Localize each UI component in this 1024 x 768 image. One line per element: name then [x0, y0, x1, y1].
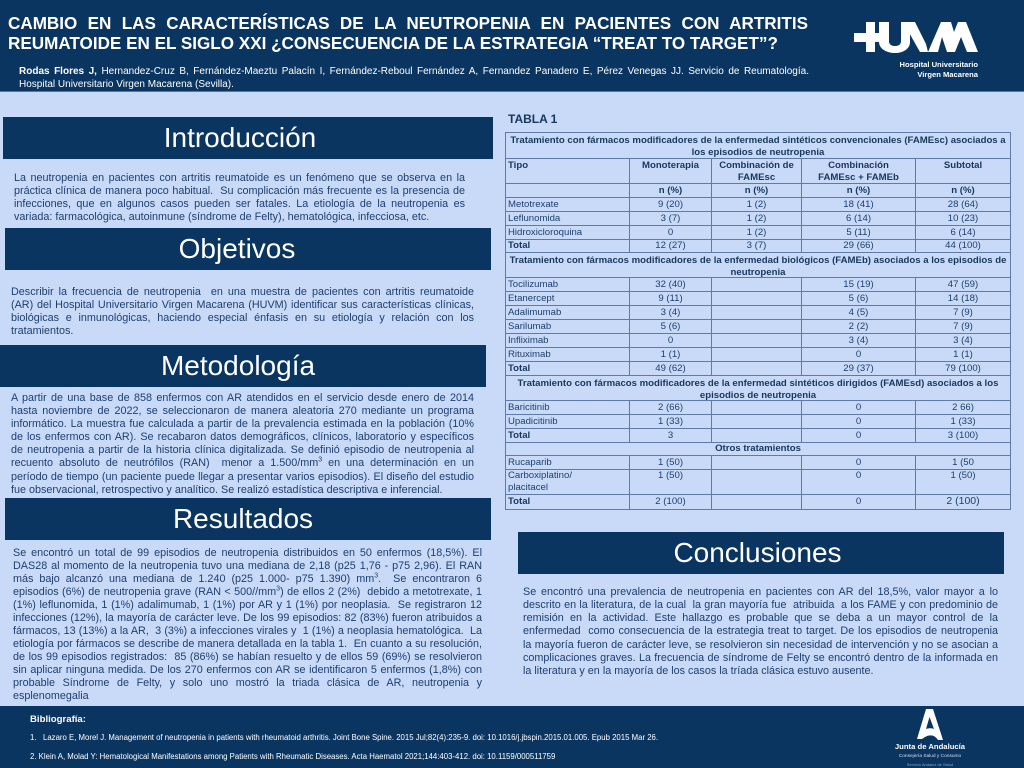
table 1: 32 (40) — [655, 279, 686, 290]
text: resultados: fármacos, 13 (13%) a la AR, 3 (3%) a infecciones virales y 1 (1%) a neoplasia hematológica. La — [13, 625, 482, 637]
table 1: 3 (4) — [849, 335, 868, 346]
heading: Introducción: Introducción — [164, 122, 316, 153]
table 1: Total — [508, 240, 530, 251]
table 1: placitacel — [508, 482, 548, 493]
table 1: 14 (18) — [948, 293, 978, 304]
text: conclusiones: Se encontró una prevalencia de neutropenia en pacientes con AR del 18,5%, valor mayor a lo — [523, 586, 998, 598]
table 1: 1 (50) — [658, 470, 683, 481]
heading: Introducción — [3, 117, 493, 159]
table 1: 3 (4) — [661, 307, 680, 318]
table 1: 29 (66) — [843, 240, 874, 251]
text: introducción: La neutropenia en pacientes con artritis reumatoide es un fenómeno que se observa en la — [14, 172, 465, 184]
text: resultados: episodios (6%) de neutropenia grave (RAN < 500//mm3) de ellos 2 (2%) debido a metotrexate, 1 — [13, 585, 482, 598]
table 1: FAMEsc — [738, 172, 775, 182]
table 1: Etanercept — [508, 293, 554, 304]
title: CAMBIO EN LAS CARACTERÍSTICAS DE LA NEUTROPENIA EN PACIENTES CON ARTRITIS — [8, 14, 808, 33]
table 1: Adalimumab — [508, 307, 561, 318]
table 1: n (%) — [745, 185, 768, 196]
table 1: Monoterapia — [642, 160, 699, 171]
table 1: 44 (100) — [945, 240, 981, 251]
table 1: 9 (20) — [658, 199, 683, 210]
table 1: 0 — [856, 496, 861, 507]
text: metodología — [11, 392, 474, 496]
table 1: Total — [508, 363, 530, 374]
reference 1: 1. Lazaro E, Morel J. Management of neutropenia in patients with rheumatoid arthritis. Joint Bone Spine. 2015 Jul;82(4):235-9. doi: 10.1016/j.jbspin.2015.01.005. Epub 2015 Mar 26. — [30, 733, 658, 742]
table 1: 18 (41) — [843, 199, 874, 210]
table 1: 0 — [668, 335, 673, 346]
table 1: 0 — [856, 470, 861, 481]
table 1: 3 (100) — [948, 430, 978, 441]
heading: Resultados: Resultados — [173, 503, 313, 534]
table 1: Carboxiplatino/ — [508, 470, 572, 481]
table 1: 0 — [856, 402, 861, 413]
text: conclusiones: remisión en la actividad. Este hallazgo es probable que se deba a un mayor control de la — [523, 612, 998, 624]
table 1: 0 — [856, 349, 861, 360]
text: resultados: (1%) leflunomida, 1 (1%) adalimumab, 1 (1%) por AR y 1 (1%) por neoplasia. Se registraron 12 — [13, 599, 482, 611]
text: resultados: más bajo alcanzó una mediana de 1.240 (p25 1.000- p75 1.390) mm3. Se encontraron 6 — [13, 572, 482, 585]
table 1: Upadicitinib — [508, 416, 558, 427]
text: objetivos: Describir la frecuencia de neutropenia en una muestra de pacientes con artritis reumatoide — [11, 286, 474, 298]
table 1: 1 (50 — [952, 457, 974, 468]
table 1: n (%) — [847, 185, 870, 196]
table 1: 2 (66) — [658, 402, 683, 413]
text: objetivos: (AR) del Hospital Universitario Virgen Macarena (HUVM) identificar sus características clínicas, — [11, 299, 474, 311]
table 1: Rituximab — [508, 349, 551, 360]
table 1: Metotrexate — [508, 199, 559, 210]
text: resultados: infecciones (12%), la mayoría de carácter leve. De los 99 episodios: 82 (83%) fueron atribuidos a — [13, 612, 482, 624]
text: introducción — [14, 172, 465, 223]
table 1: n (%) — [951, 185, 975, 196]
text: resultados: DAS28 al momento de la neutropenia tuvo una mediana de 2,18 (p25 1,76 - p75 2,96). El RAN — [13, 560, 482, 572]
table 1: 3 (7) — [747, 240, 766, 251]
table 1: Tratamiento con fármacos modificadores de la enfermedad sintéticos convencionales (FAMEsc) asociados a los episodios de neutropenia — [510, 135, 1006, 158]
table 1: Hidroxicloroquina — [508, 227, 582, 238]
heading: Objetivos — [5, 228, 491, 270]
table 1: 5 (11) — [846, 227, 871, 238]
table 1: 7 (9) — [953, 307, 973, 318]
heading: Resultados — [5, 498, 491, 540]
text: resultados: etiología por fármacos se describe de manera detallada en la tabla 1. En cuanto a su resolución, — [13, 638, 482, 650]
table 1: 1 (1) — [953, 349, 973, 360]
table 1: Total — [508, 496, 530, 507]
icon: HUVM logo — [854, 22, 978, 53]
text: introducción: variada: farmacológica, autoinmune (síndrome de Felty), hematológica, infecciosa, etc. — [14, 211, 429, 223]
table 1: 15 (19) — [843, 279, 874, 290]
text: metodología: de los enfermos con AR). Se recabaron datos demográficos, clínicos, laboratorio y específicos — [11, 431, 474, 443]
text: metodología: hasta noviembre de 2022, se seleccionaron de manera aleatoria 270 mediante un programa — [11, 405, 474, 417]
text: conclusiones — [523, 586, 998, 677]
table 1: 28 (64) — [948, 199, 978, 210]
footer band — [0, 706, 1024, 768]
text: metodología: de neutropenia a partir de la historia clínica digitalizada. Se definió episodio de neutropenia al — [11, 444, 474, 456]
text: introducción: infecciones, que en algunos casos pueden ser fatales. La etiología de la neutropenia es — [14, 198, 465, 210]
text: resultados: esplenomegalia — [13, 690, 89, 702]
table 1: Tratamiento con fármacos modificadores de la enfermedad biológicos (FAMEb) asociados a los episodios de neutropenia — [510, 255, 1006, 278]
table 1 — [505, 132, 1011, 510]
heading: Conclusiones: Conclusiones — [673, 537, 842, 568]
table 1: Baricitinib — [508, 402, 550, 413]
table 1: 3 (4) — [953, 335, 973, 346]
table 1: 0 — [856, 457, 861, 468]
table 1: 29 (37) — [843, 363, 874, 374]
text: resultados: de los 99 episodios registrados: 85 (86%) se habían resuelto y de ellos 59 (69%) se resolvieron — [13, 651, 482, 663]
table 1: 2 (100) — [655, 496, 686, 507]
table 1: 5 (6) — [661, 321, 680, 332]
text: metodología: A partir de una base de 858 enfermos con AR atendidos en el servicio desde enero de 2014 — [11, 392, 474, 404]
text: introducción: práctica clínica de manera poco habitual. Su complicación más frecuente es la presencia de — [14, 185, 465, 197]
text: metodología: recuento absoluto de neutrófilos (RAN) menor a 1.500/mm3 en una determinación en un — [11, 457, 474, 469]
table 1: 6 (14) — [950, 227, 976, 238]
table 1: Tratamiento con fármacos modificadores de la enfermedad sintéticos dirigidos (FAMEsd) asociados a los episodios de neutropenia — [518, 378, 998, 401]
text: conclusiones: enfermedad como consecuencia de la estrategia treat to target. De los episodios de neutropenia — [523, 625, 998, 637]
table 1: 1 (2) — [747, 213, 766, 224]
table 1: Total — [508, 430, 530, 441]
heading: Objetivos: Objetivos — [179, 233, 295, 264]
table 1: 47 (59) — [948, 279, 978, 290]
table 1: Infliximab — [508, 335, 549, 346]
table 1: n (%) — [659, 185, 682, 196]
text: resultados: Se encontró un total de 99 episodios de neutropenia distribuidos en 50 enfermos (18,5%). El — [13, 547, 482, 559]
table 1: 49 (62) — [655, 363, 686, 374]
table 1: 1 (50) — [658, 457, 683, 468]
table 1: 1 (33) — [658, 416, 683, 427]
logo caption: Virgen Macarena — [917, 70, 978, 78]
table 1: Tipo — [508, 160, 528, 171]
text: conclusiones: descrito en la literatura, de la cual la gran mayoría fue atribuida a los FAME y con predominio de — [523, 599, 998, 611]
text: resultados: sin aplicar ninguna medida. De los 270 enfermos con AR se identificaron 5 enfermos (1,8%) con — [13, 664, 482, 676]
table 1: 1 (1) — [661, 349, 680, 360]
text: objetivos: biológicas e inmunológicas, haciendo especial énfasis en su etiología y relación con los — [11, 312, 474, 324]
table 1: 10 (23) — [948, 213, 978, 224]
table 1: 1 (2) — [747, 199, 766, 210]
reference 2: 2. Klein A, Molad Y: Hematological Manifestations among Patients with Rheumatic Diseases. Acta Haematol 2021;144:403-412. doi: 10.1159/000511759 — [30, 752, 555, 761]
logo caption: Consejería: Consejería Salud y Consumo — [899, 754, 961, 759]
authors: Hospital Universitario Virgen Macarena (Sevilla). — [19, 79, 234, 90]
title: REUMATOIDE EN EL SIGLO XXI ¿CONSECUENCIA DE LA ESTRATEGIA “TREAT TO TARGET”? — [8, 34, 778, 52]
text: metodología: fue observacional, retrospectivo y analítico. Se realizó estadística descriptiva e inferencial. — [11, 484, 442, 496]
table 1: 4 (5) — [849, 307, 868, 318]
table 1: Tocilizumab — [508, 279, 558, 290]
table 1: 1 (50) — [950, 470, 976, 481]
table 1: 7 (9) — [953, 321, 973, 332]
text: objetivos — [11, 286, 474, 337]
table 1: 9 (11) — [658, 293, 683, 304]
text: conclusiones: la literatura y en la mayoría de los casos la tríada clásica estuvo ausente. — [523, 665, 873, 677]
text: conclusiones: complicaciones graves. La frecuencia de síndrome de Felty se encontró dentro de la informada en — [523, 652, 998, 664]
table 1: 6 (14) — [846, 213, 871, 224]
text: conclusiones: la mayoría fueron de carácter leve, se resolvieron sin necesidad de intervención y no se asocian a — [523, 639, 998, 651]
table 1: 0 — [668, 227, 673, 238]
heading: Metodología — [0, 345, 486, 387]
table 1: 3 (7) — [661, 213, 680, 224]
icon: Junta de Andalucía logo — [917, 709, 943, 740]
heading: Metodología: Metodología — [161, 350, 315, 381]
table 1: Otros tratamientos — [715, 443, 801, 454]
table 1: 1 (33) — [950, 416, 976, 427]
table 1: Sarilumab — [508, 321, 551, 332]
table 1: 3 — [668, 430, 673, 441]
table 1: 79 (100) — [945, 363, 981, 374]
table 1: 5 (6) — [849, 293, 868, 304]
table 1: 12 (27) — [655, 240, 686, 251]
text: resultados — [13, 547, 482, 702]
title — [8, 13, 808, 52]
header band — [0, 0, 1024, 92]
table 1: 0 — [856, 416, 861, 427]
heading: Conclusiones — [518, 532, 1004, 574]
table 1: FAMEsc + FAMEb — [818, 172, 899, 182]
authors: Rodas Flores J, Hernandez-Cruz B, Fernández-Maeztu Palacín I, Fernández-Reboul Fernández A, Fernandez Panadero E, Pérez Venegas JJ. Servicio de Reumatología. — [19, 66, 809, 77]
logo caption: Hospital Universitario — [900, 60, 978, 69]
table heading: TABLA 1 — [508, 112, 557, 126]
bibliography heading: Bibliografía: — [30, 714, 86, 725]
logo caption — [900, 60, 978, 78]
authors — [19, 66, 809, 90]
table 1: Combinación de — [719, 160, 794, 171]
text: metodología: informático. La muestra fue calculada a partir de la prevalencia estimada en la población (10% — [11, 418, 474, 430]
logo caption: Junta de Andalucía: Junta de Andalucía — [895, 742, 965, 751]
table 1: 2 (100) — [946, 495, 980, 507]
table 1: Leflunomida — [508, 213, 560, 224]
text: metodología: período de tiempo (un paciente puede llegar a presentar varios episodios). El diseño del estudio — [11, 471, 474, 483]
text: resultados: probable Síndrome de Felty, y solo uno mostró la triada clásica de AR, neutropenia y — [13, 677, 482, 689]
table 1: Subtotal — [944, 160, 982, 171]
table 1: 2 66) — [952, 402, 974, 413]
table 1: 1 (2) — [747, 227, 766, 238]
table 1: Combinación — [828, 160, 889, 171]
logo caption: Servicio: Servicio Andaluz de Salud — [907, 762, 953, 767]
text: objetivos: tratamientos. — [11, 325, 73, 337]
table 1: Rucaparib — [508, 457, 552, 468]
table 1: 2 (2) — [849, 321, 868, 332]
table 1: 0 — [856, 430, 861, 441]
